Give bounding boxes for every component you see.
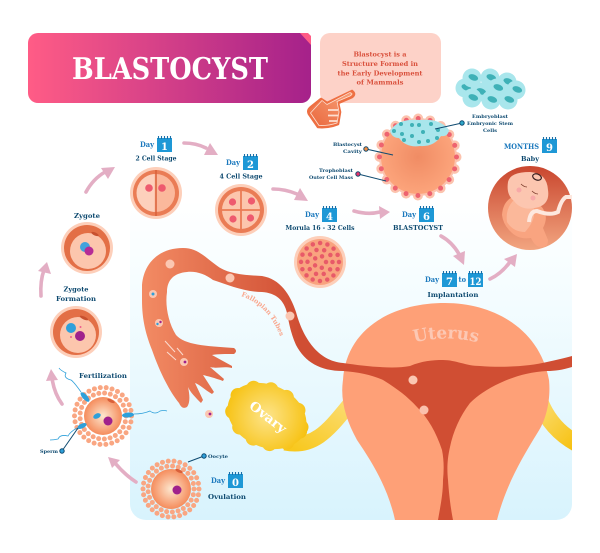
label: zygote formation	[56, 286, 96, 303]
arrow: ovulation to fertilization	[108, 457, 136, 482]
pointer: blastocyst cavity	[364, 147, 393, 155]
label: blastocyst stage: BLASTOCYST	[393, 224, 443, 232]
teal stem cell cluster	[456, 68, 526, 110]
callout: definition: of Mammals	[356, 80, 404, 86]
uterus	[342, 303, 549, 520]
label: zygote: Zygote	[74, 212, 101, 220]
ovary	[221, 375, 313, 457]
label: months 9	[504, 137, 557, 154]
arrow: day 1 to day 2	[184, 143, 218, 155]
label: day 7 to 12: to	[458, 275, 466, 284]
label: day 0: Day	[211, 476, 226, 485]
title banner	[28, 33, 311, 103]
label: zygote formation: Formation	[56, 295, 96, 303]
label: day 6: 6	[423, 212, 430, 223]
label: day 7 to 12: Day	[425, 275, 440, 284]
label: day 7 to 12: 7	[446, 277, 453, 288]
cell: zygote formation	[50, 306, 102, 358]
label: day 4: Day	[305, 210, 320, 219]
ligament right	[542, 400, 572, 450]
arrow: day 4 to day 6	[354, 206, 390, 219]
label: day 0	[211, 472, 243, 489]
label: embryoblast: Cells	[483, 128, 497, 134]
background panel	[130, 200, 572, 520]
label: day 7 to 12	[425, 271, 483, 288]
cell: zygote	[61, 222, 113, 274]
label: oocyte: Oocyte	[208, 454, 228, 460]
label: day 2: Day	[226, 158, 241, 167]
arrow: zygote to day 1	[86, 167, 115, 192]
label: trophoblast	[309, 168, 354, 181]
label: fertilization: Fertilization	[79, 372, 127, 380]
label: embryoblast	[467, 114, 514, 134]
label: baby: Baby	[521, 155, 540, 163]
title banner: BLASTOCYST	[72, 52, 269, 87]
label: day 0: 0	[232, 478, 239, 489]
label: implantation: Implantation	[428, 291, 479, 299]
ovary: Ovary	[246, 399, 289, 437]
arrow: day 6 to implantation	[441, 236, 465, 265]
label: uterus: Uterus	[412, 327, 478, 342]
callout: definition	[320, 33, 441, 103]
label: trophoblast: Outer Cell Mass	[309, 175, 353, 181]
cell: oocyte ovulation	[143, 461, 199, 517]
label: day 1	[140, 136, 172, 153]
icon: pointing hand	[308, 91, 354, 127]
baby in womb	[488, 166, 572, 250]
label: day 2	[226, 154, 258, 171]
callout: definition: the Early Development	[338, 70, 423, 78]
arrow: day 2 to day 4	[273, 188, 308, 201]
blastocyst cell	[379, 118, 457, 196]
label: 2 cell stage: 2 Cell Stage	[136, 154, 177, 162]
label: blastocyst cavity	[333, 142, 363, 155]
callout: definition: Structure Formed in	[342, 61, 418, 68]
pointer: sperm	[60, 428, 78, 453]
label: blastocyst cavity: Cavity	[343, 149, 363, 155]
label: day 7 to 12: 12	[470, 277, 482, 288]
label: day 4: 4	[326, 212, 333, 223]
arrow: fertilization to zygote formation	[46, 369, 62, 404]
pointer: trophoblast	[356, 172, 386, 181]
label: months 9: MONTHS	[504, 142, 539, 151]
label: day 6	[402, 206, 434, 223]
cell: fertilization	[74, 388, 132, 444]
label: months 9: 9	[546, 143, 553, 154]
label: day 6: Day	[402, 210, 417, 219]
label: ovulation: Ovulation	[208, 493, 246, 501]
label: zygote formation: Zygote	[64, 286, 89, 294]
pointer: oocyte	[188, 454, 206, 462]
label: day 1: Day	[140, 140, 155, 149]
label: day 2: 2	[247, 160, 254, 171]
label: 4 cell stage: 4 Cell Stage	[220, 172, 263, 180]
cell: 4 cell stage	[215, 184, 267, 236]
label: day 4	[305, 206, 337, 223]
label: fallopian tubes: Fallopian Tubes	[241, 292, 283, 336]
label: trophoblast: Trophoblast	[319, 168, 354, 174]
label: morula: Morula 16 - 32 Cells	[286, 224, 355, 232]
label: embryoblast: Embryoblast	[472, 114, 509, 120]
label: day 1: 1	[161, 142, 168, 153]
label: blastocyst cavity: Blastocyst	[333, 142, 363, 148]
pointer: embryoblast	[435, 121, 464, 129]
cell: 2 cell stage	[130, 167, 182, 219]
arrow: implantation to baby	[490, 254, 517, 279]
travelling cells in tube	[149, 260, 428, 418]
fallopian tube left and uterine cavity	[142, 248, 572, 520]
label: embryoblast: Embryonic Stem	[467, 121, 514, 127]
label: sperm: Sperm	[40, 449, 59, 455]
arrow: zygote formation to zygote	[38, 262, 51, 296]
ligament left	[285, 405, 349, 444]
callout: definition: Blastocyst is a	[354, 52, 406, 58]
sperm cells	[50, 368, 167, 440]
cell: morula	[294, 236, 346, 288]
